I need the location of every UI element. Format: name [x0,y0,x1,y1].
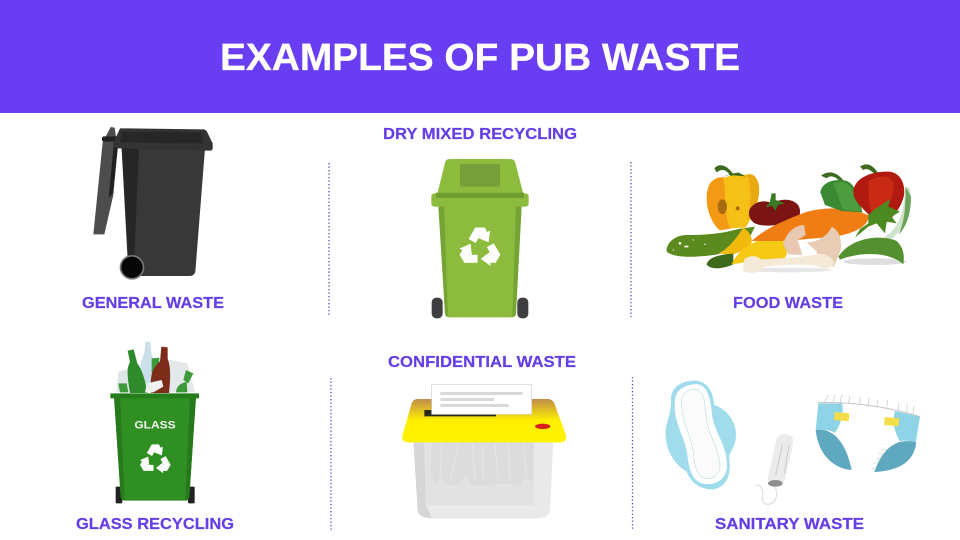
label: general waste: GENERAL WASTE [82,295,224,312]
icon: sanitary pad, tampon and nappy [666,381,920,504]
icon: sanitary pad [666,381,736,489]
icon: dry mixed recycling green bin [431,159,529,318]
header banner [0,0,960,113]
label: dry mixed recycling: DRY MIXED RECYCLING [383,126,577,143]
icon: glass recycling bin [110,342,199,503]
label: glass recycling: GLASS RECYCLING [76,516,234,533]
icon: nappy [816,395,920,472]
icon: tampon [756,434,793,504]
icon: general waste black wheelie bin [93,127,213,280]
label: sanitary waste: SANITARY WASTE [715,516,864,533]
icon: rotting food waste [667,164,911,273]
label: food waste: FOOD WASTE [733,295,843,312]
title: EXAMPLES OF PUB WASTE [220,37,740,79]
label: confidential waste: CONFIDENTIAL WASTE [388,354,576,371]
icon: paper shredder [402,384,566,518]
bin label: GLASS [134,419,176,431]
